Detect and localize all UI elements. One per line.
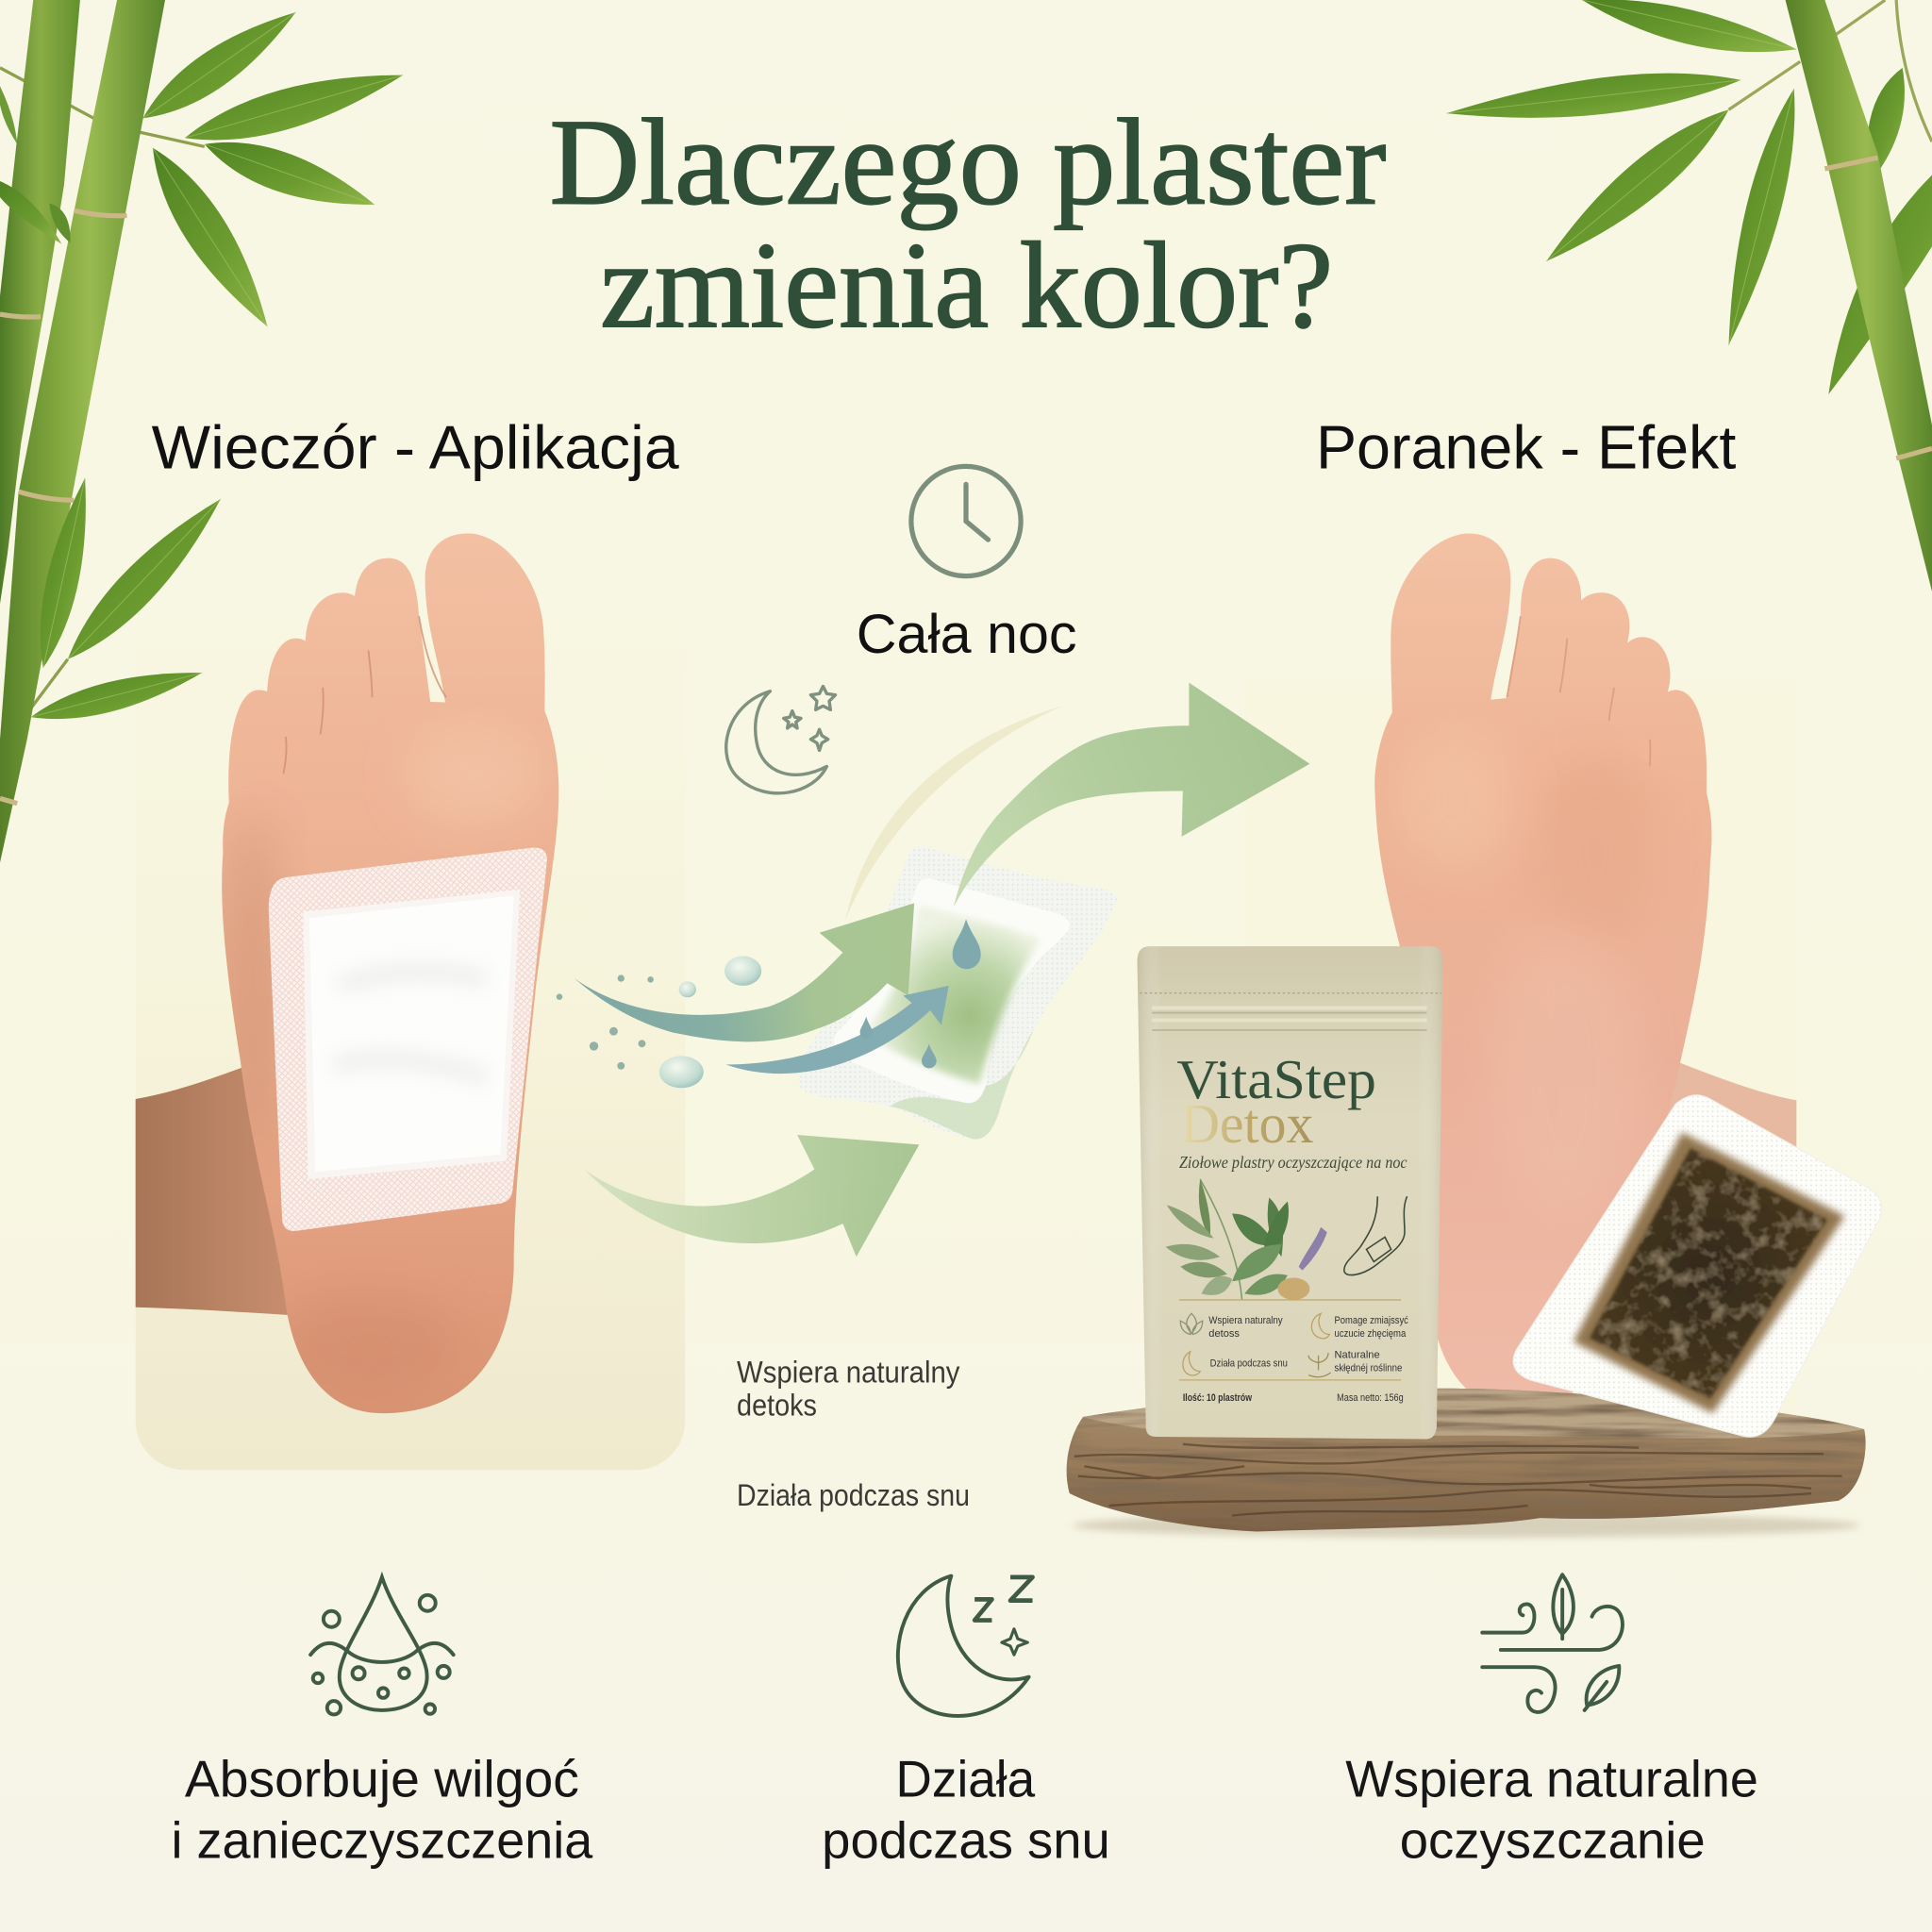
icon: absorbing drop: [310, 1577, 454, 1714]
used dark patch: [1513, 1095, 1882, 1437]
pale swoosh: [845, 706, 1062, 921]
leaf: [49, 204, 71, 242]
brown stain: [1590, 1148, 1827, 1398]
leaf: [143, 12, 295, 118]
particles: [557, 974, 654, 1070]
twigs: [0, 68, 205, 708]
right foot: [1374, 533, 1796, 1413]
arrow: lower green: [584, 1135, 919, 1257]
note: supports detox: detoks: [737, 1389, 817, 1423]
herb illustration: [1166, 1179, 1327, 1300]
leaf behind stalk: [1828, 175, 1932, 394]
brand: VitaStep: VitaStep: [1176, 1049, 1376, 1110]
bamboo stalk: [1786, 0, 1932, 591]
pouch features: detoss: [1208, 1328, 1240, 1340]
zip seal shadow: [1152, 1013, 1426, 1030]
toe creases: [283, 616, 446, 774]
heading: morning: Poranek - Efekt: [1316, 412, 1736, 481]
note: supports detox: [737, 1355, 959, 1423]
benefit: works while sleeping: Działa: [896, 1749, 1036, 1807]
leaf midribs: [1446, 0, 1796, 345]
leaf: [41, 478, 86, 668]
benefit: absorbs: Absorbuje wilgoć: [185, 1749, 579, 1807]
pouch features: uczucie zhęcięma: [1335, 1328, 1407, 1340]
sole: [222, 700, 558, 1413]
brown stain halo: [1574, 1132, 1844, 1413]
pouch feature icons: [1180, 1313, 1331, 1377]
note: works during sleep: Działa podczas snu: [737, 1478, 970, 1512]
leg: [1626, 1062, 1796, 1232]
benefit: absorbs: i zanieczyszczenia: [172, 1811, 593, 1870]
pouch features: Naturalne: [1335, 1349, 1380, 1360]
toes: [228, 533, 545, 808]
leg: [136, 1059, 302, 1316]
pad folds: [333, 972, 487, 1078]
left foot: [136, 533, 558, 1413]
panel: evening backdrop: [136, 616, 685, 1470]
patch backing: [1513, 1095, 1882, 1437]
benefit: works while sleeping: [822, 1749, 1110, 1870]
leaf: [68, 499, 221, 659]
patch green edge tint: [890, 1029, 1034, 1140]
patch pad halo: [303, 890, 520, 1179]
foot line icon: [1344, 1196, 1407, 1275]
droplets: [860, 919, 981, 1068]
leaf: [1728, 89, 1794, 345]
brand: Detox: Detox: [1180, 1093, 1313, 1155]
arrow: small blue: [725, 986, 949, 1074]
tagline: Ziołowe plastry oczyszczające na noc: [1179, 1153, 1407, 1172]
leaf: [0, 181, 61, 244]
benefit: absorbs: [172, 1749, 593, 1870]
left bamboo: [0, 0, 403, 862]
pouch features: [1183, 1315, 1408, 1404]
leaf: [1446, 74, 1741, 118]
patch outer layer: [799, 846, 1117, 1140]
benefit: supports cleansing: Wspiera naturalne: [1345, 1749, 1758, 1807]
leaf: [185, 75, 403, 140]
pouch body: [1138, 946, 1442, 1440]
twigs: [1728, 0, 1932, 142]
leaf midribs: [31, 12, 403, 717]
toe creases: [1507, 616, 1650, 766]
icon: wind with leaves: [1482, 1574, 1623, 1712]
pouch dividers: [1179, 1300, 1401, 1380]
pouch edge shading: [1138, 946, 1442, 1440]
label: all night: Cała noc: [857, 604, 1077, 665]
pouch features: Działa podczas snu: [1210, 1357, 1288, 1369]
pouch features: Wspiera naturalny: [1208, 1315, 1283, 1326]
leaf: [153, 148, 267, 326]
slab side: [1067, 1389, 1866, 1532]
bubbles: [659, 957, 761, 1088]
patch pad: [309, 896, 514, 1172]
benefit: supports cleansing: oczyszczanie: [1400, 1811, 1706, 1870]
bamboo stalk back: [0, 0, 80, 604]
leaf: [0, 86, 17, 144]
toes: [1391, 533, 1707, 801]
patch inner pad: [834, 878, 1070, 1103]
leaf: [1582, 0, 1796, 52]
icon: crescent moon with zz: [898, 1576, 1033, 1716]
bamboo nodes: [1824, 158, 1932, 458]
pouch features: Ilość: 10 plastrów: [1183, 1392, 1252, 1404]
right bamboo: [1446, 0, 1932, 591]
icon: moon and stars: [726, 687, 836, 793]
sole: [1374, 692, 1711, 1413]
arrow: into patch, blue to green: [575, 903, 914, 1041]
leaf: [1546, 109, 1728, 261]
note: supports detox: Wspiera naturalny: [737, 1355, 959, 1389]
leaf: [31, 673, 202, 719]
pouch features: Masa netto: 156g: [1337, 1392, 1404, 1404]
leaf behind stalk: [1867, 68, 1905, 173]
benefit: supports cleansing: [1345, 1749, 1758, 1870]
zip seal: [1152, 1008, 1426, 1020]
adhesive patch on foot: [269, 848, 547, 1231]
wood grain: [1074, 1444, 1842, 1516]
title: Dlaczego plaster: [550, 95, 1386, 231]
product pouch: [1138, 946, 1442, 1440]
slab top: [1083, 1389, 1864, 1439]
sole shading: [223, 727, 542, 1392]
title: [550, 95, 1386, 354]
centre patch illustration: [799, 846, 1117, 1140]
title: zmienia kolor?: [600, 218, 1333, 354]
panel: morning backdrop: [1244, 680, 1796, 1469]
pouch features: Pomage zmiajssyć: [1335, 1315, 1408, 1326]
bamboo nodes: [0, 210, 127, 804]
slab shadow: [1072, 1513, 1860, 1538]
benefit: works while sleeping: podczas snu: [822, 1811, 1110, 1870]
icon: clock: [911, 466, 1021, 576]
bamboo stalk front: [0, 0, 165, 862]
patch green centre: [862, 906, 1041, 1084]
heading: evening: Wieczór - Aplikacja: [152, 412, 679, 481]
wood slab: [1067, 1389, 1866, 1538]
leaf: [205, 142, 375, 205]
patch border: [269, 848, 547, 1231]
arrow: upper green to right foot: [954, 683, 1309, 907]
sole shading: [1413, 764, 1618, 906]
pouch features: skłędnéj roślinne: [1335, 1363, 1402, 1374]
tear line: [1140, 992, 1441, 994]
